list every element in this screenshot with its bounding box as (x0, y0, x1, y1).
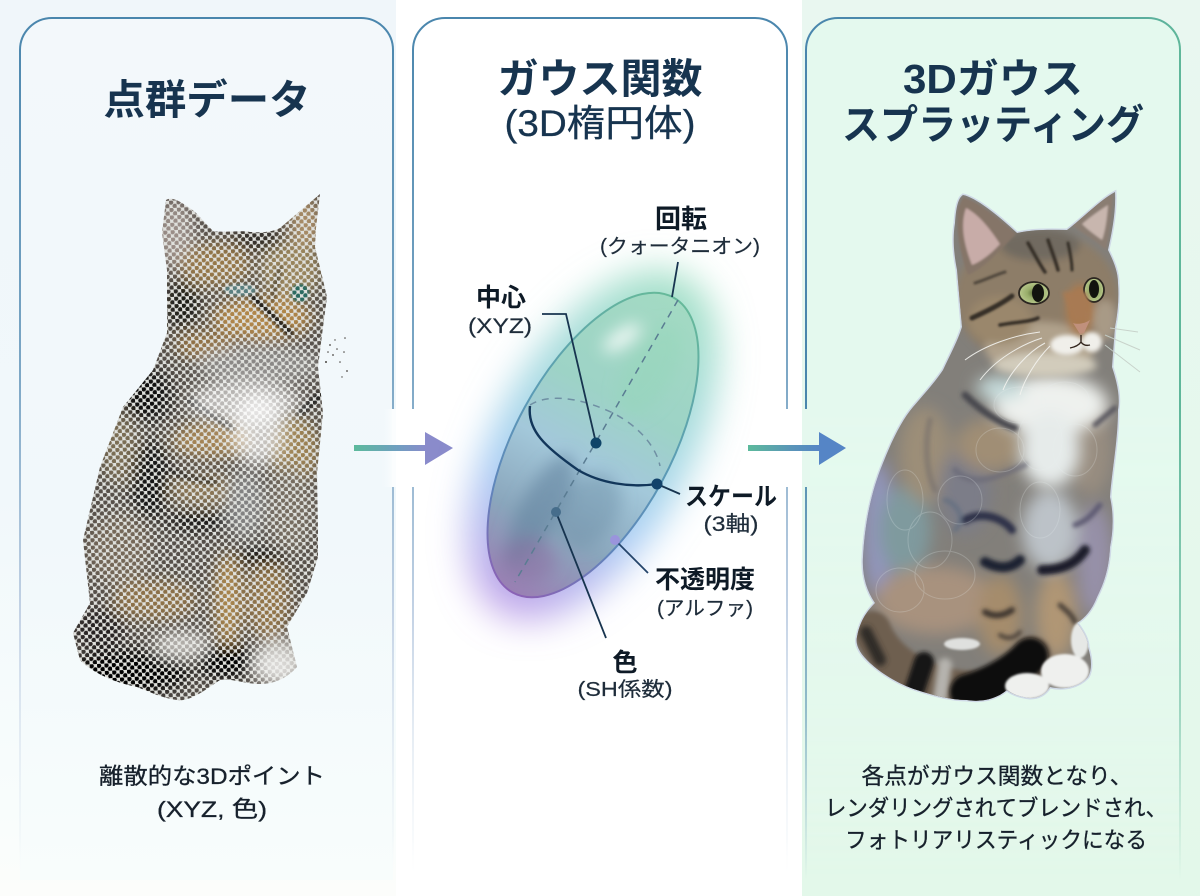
head (955, 194, 1119, 377)
label: rotation: (クォータニオン) (600, 235, 760, 258)
background: right tint (802, 0, 1200, 896)
label: colour: 色 (612, 649, 638, 677)
illustration: gaussian ellipsoid (415, 230, 771, 660)
ellipsoid body (444, 260, 742, 630)
arrow gap left (380, 409, 420, 487)
head stripes (972, 240, 1072, 325)
axis (515, 300, 678, 582)
translucent splat scales (876, 382, 1097, 612)
panel: point cloud (20, 18, 393, 880)
illustration: photorealistic cat (850, 185, 1140, 710)
tail (866, 630, 1032, 698)
label: center: 中心 (476, 284, 526, 312)
halo (415, 230, 771, 660)
illustration: point cloud cat (60, 185, 350, 710)
body shading (493, 315, 695, 582)
caption: splatting (825, 764, 1167, 853)
ears (957, 194, 1113, 275)
label: colour: (SH係数) (578, 678, 672, 701)
arrow: point cloud to gaussian (354, 432, 453, 465)
paws (944, 622, 1089, 699)
back ring (530, 398, 660, 466)
label: scale: (3軸) (704, 513, 758, 536)
nose and muzzle (1050, 292, 1102, 355)
whiskers (965, 328, 1140, 395)
arrow gap right (783, 409, 810, 487)
label: opacity: (アルファ) (657, 598, 753, 620)
eye left (1019, 282, 1049, 304)
body tones (862, 460, 894, 600)
label: rotation: 回転 (655, 204, 707, 234)
subtitle: 3D ellipsoid: (3D楕円体) (504, 103, 696, 144)
panel: gaussian (413, 18, 787, 880)
pupil left (1032, 284, 1044, 302)
soft white chest (156, 380, 301, 684)
eye right (1084, 278, 1104, 302)
caption: point cloud: (XYZ, 色) (157, 797, 267, 822)
caption: point cloud (99, 764, 325, 822)
ellipsoid outline (444, 260, 742, 630)
caption: splatting: レンダリングされてブレンドされ、 (825, 796, 1167, 821)
caption: point cloud: 離散的な3Dポイント (99, 764, 325, 789)
title: splatting: スプラッティング (842, 102, 1144, 148)
label: opacity (655, 566, 755, 620)
pupil right (1089, 280, 1099, 298)
caption: splatting: フォトリアリスティックになる (845, 828, 1147, 853)
label: opacity: 不透明度 (655, 566, 755, 594)
leaders (542, 262, 680, 638)
label: colour (578, 649, 672, 701)
title: point cloud: 点群データ (104, 77, 310, 123)
label: center (468, 284, 532, 338)
title: gaussian function: ガウス関数 (498, 56, 702, 102)
arrow: gaussian to splatting (748, 432, 846, 465)
panel: splatting (806, 18, 1180, 880)
tonal underlay between the points (73, 194, 327, 700)
front ring (530, 406, 657, 485)
stripes in the dots (170, 268, 320, 482)
label: scale: スケール (685, 483, 777, 511)
label: center: (XYZ) (468, 315, 532, 338)
eye marks (224, 284, 309, 302)
white chest (992, 375, 1108, 435)
title: 3D gaussian: 3Dガウス (903, 56, 1083, 102)
parameter dots (590, 438, 602, 448)
stray points (325, 337, 348, 378)
label: scale (685, 483, 777, 536)
caption: splatting: 各点がガウス関数となり、 (862, 764, 1132, 789)
label: rotation (600, 204, 760, 258)
background: left tint (0, 0, 396, 896)
body stripes (965, 395, 1015, 428)
